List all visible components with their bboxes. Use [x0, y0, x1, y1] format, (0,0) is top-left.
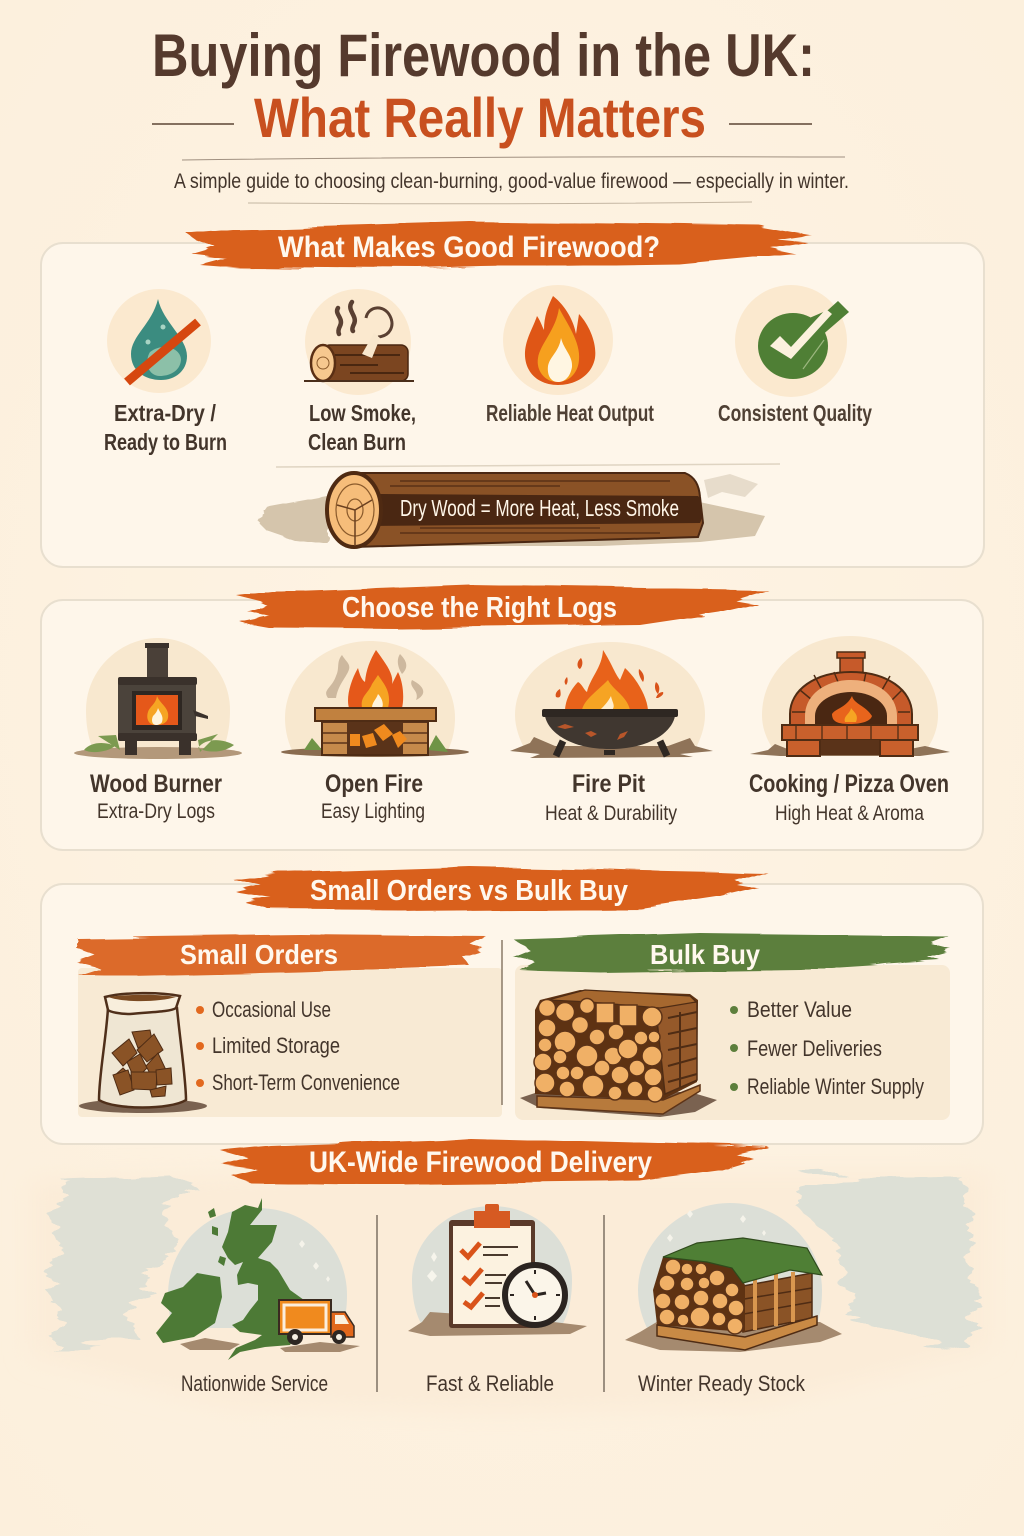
label: low smoke — [308, 400, 416, 455]
icon: flame — [503, 285, 613, 395]
icon: low smoke log — [304, 289, 414, 395]
icon: crossed-out water drop — [107, 289, 211, 393]
label: winter ready stock: Winter Ready Stock — [638, 1371, 806, 1396]
label: open fire: Open Fire — [325, 770, 423, 798]
heading banner: delivery — [220, 1138, 768, 1184]
section: uk-wide delivery — [30, 1138, 990, 1414]
panel: choose the right logs — [41, 585, 983, 850]
sub-heading: bulk buy: Bulk Buy — [650, 939, 760, 970]
icon: quality check mark — [735, 285, 849, 397]
heading banner: choose the right logs — [238, 585, 768, 628]
list: bulk buy — [730, 997, 924, 1099]
list: small orders: Limited Storage — [212, 1033, 340, 1058]
sub-panel: bulk buy — [513, 933, 950, 1120]
label: low smoke: Clean Burn — [308, 429, 406, 455]
heading banner: small vs bulk — [232, 867, 768, 910]
label: fast and reliable: Fast & Reliable — [426, 1371, 554, 1396]
label: nationwide service: Nationwide Service — [181, 1371, 328, 1396]
sub-heading: small orders: Small Orders — [180, 939, 338, 970]
list: small orders: Short-Term Convenience — [212, 1070, 400, 1095]
heading banner: small vs bulk: Small Orders vs Bulk Buy — [310, 875, 628, 907]
list: bulk buy: Better Value — [747, 997, 852, 1022]
label: extra-dry: Extra-Dry / — [114, 400, 217, 426]
icon: covered log store — [625, 1203, 842, 1352]
label: wood burner: Wood Burner — [90, 770, 222, 798]
label: cooking — [749, 770, 949, 825]
icon: uk map with truck — [156, 1198, 360, 1360]
list: bulk buy: Fewer Deliveries — [747, 1036, 882, 1061]
subtitle — [174, 157, 849, 204]
label: open fire — [321, 770, 425, 823]
heading banner: delivery: UK-Wide Firewood Delivery — [309, 1146, 652, 1179]
title — [152, 22, 815, 149]
icon: log stack — [520, 990, 717, 1117]
label: cooking: Cooking / Pizza Oven — [749, 770, 949, 798]
icon: wood burner — [74, 638, 242, 759]
list: small orders: Occasional Use — [212, 997, 331, 1022]
list: bulk buy: Reliable Winter Supply — [747, 1074, 924, 1099]
title: What Really Matters — [254, 86, 706, 149]
label: consistent quality: Consistent Quality — [718, 400, 872, 426]
label: wood burner: Extra-Dry Logs — [97, 800, 215, 823]
icon: sack of logs — [79, 993, 207, 1113]
dry wood log banner — [258, 464, 780, 547]
heading banner: what makes good firewood — [186, 222, 812, 269]
label: fire pit — [545, 770, 677, 825]
label: fire pit: Heat & Durability — [545, 802, 677, 825]
heading banner: what makes good firewood: What Makes Good Firewood? — [278, 231, 660, 264]
subtitle: A simple guide to choosing clean-burning, good-value firewood — especially in winter. — [174, 170, 849, 193]
panel: what makes good firewood — [41, 222, 984, 567]
label: reliable heat: Reliable Heat Output — [486, 400, 654, 426]
list: small orders — [196, 997, 400, 1095]
sub-heading: bulk buy — [513, 933, 950, 972]
icon: fire pit — [510, 642, 713, 758]
panel: small orders vs bulk buy — [41, 867, 983, 1144]
icon: open fire — [281, 641, 469, 757]
label: cooking: High Heat & Aroma — [775, 802, 924, 825]
dry wood log banner: Dry Wood = More Heat, Less Smoke — [400, 495, 679, 521]
label: fire pit: Fire Pit — [572, 770, 646, 798]
label: low smoke: Low Smoke, — [309, 400, 416, 426]
icon: pizza oven — [750, 636, 950, 756]
label: wood burner — [90, 770, 222, 823]
heading banner: choose the right logs: Choose the Right Logs — [342, 592, 617, 624]
sub-heading: small orders — [76, 934, 486, 976]
sub-panel: small orders — [76, 934, 502, 1117]
icon: clipboard and clock — [408, 1204, 587, 1336]
label: extra-dry — [104, 400, 227, 455]
label: extra-dry: Ready to Burn — [104, 429, 227, 455]
label: open fire: Easy Lighting — [321, 800, 425, 823]
title: Buying Firewood in the UK: — [152, 22, 815, 89]
